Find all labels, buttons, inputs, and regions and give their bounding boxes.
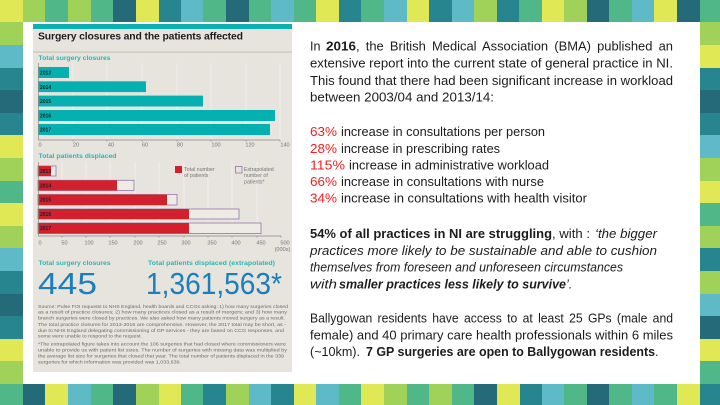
legend: total number of patients: of patients bbox=[184, 173, 209, 179]
list: workload increases: increase in administrative workload bbox=[349, 158, 549, 172]
bar chart: total patients displaced: 150 bbox=[108, 240, 118, 246]
legend: total number of patients: Total number bbox=[184, 167, 215, 173]
bar chart: total surgery closures bbox=[38, 63, 290, 148]
legend: extrapolated number of patients: Extrapolated bbox=[244, 167, 274, 173]
source notes: surgeries for which information was provided was 1,033,639. bbox=[38, 360, 181, 364]
text block: struggling practices: with bbox=[310, 278, 337, 292]
text block: BMA report intro: , the British Medical Association (BMA) published an bbox=[356, 40, 673, 54]
stat: total surgery closures 445: 445 bbox=[38, 266, 97, 301]
bar chart: total surgery closures: 2015 bbox=[40, 99, 51, 105]
heading: surgery closures and the patients affected: Surgery closures and the patients affected bbox=[38, 32, 243, 42]
text block: struggling practices: 54% of all practices in NI are struggling bbox=[310, 227, 552, 241]
text block: BMA report intro bbox=[310, 40, 673, 105]
bar chart: total patients displaced: 2014 bbox=[40, 183, 51, 189]
bar chart: total patients displaced: 250 bbox=[157, 240, 167, 246]
list: workload increases: 28% bbox=[310, 142, 337, 156]
bar chart: total patients displaced: 350 bbox=[207, 240, 217, 246]
text block: struggling practices: smaller practices less likely to survive bbox=[339, 278, 566, 292]
source notes bbox=[38, 304, 288, 364]
legend: extrapolated number of patients: patients* bbox=[244, 180, 265, 186]
bar chart: total surgery closures: 80 bbox=[177, 142, 183, 148]
list: workload increases: increase in consultations with health visitor bbox=[341, 192, 587, 206]
list: workload increases: increase in prescribing rates bbox=[341, 142, 500, 156]
bar chart: total patients displaced: 500 bbox=[280, 240, 290, 246]
legend: total number of patients bbox=[175, 166, 215, 179]
text block: BMA report intro: This found that there had been significant increase in workload bbox=[310, 74, 673, 88]
source notes: unable to provide us with patient list sizes. The number of surgeries with missing data was multiplied by bbox=[38, 347, 288, 352]
text block: BMA report intro: 2016 bbox=[326, 40, 356, 54]
stat: total patients displaced 1,361,563: 1,361,563* bbox=[146, 266, 282, 301]
bar chart: total surgery closures: 2014 bbox=[40, 85, 51, 91]
bar chart: total patients displaced: 400 bbox=[231, 240, 241, 246]
bar chart: total patients displaced: 100 bbox=[84, 240, 94, 246]
bar chart: total surgery closures: 2016 bbox=[40, 114, 51, 120]
source notes: The total practice closures for 2013-2016 are comprehensive. However, the 2017 total may be short, as - bbox=[38, 322, 287, 327]
bar chart: total patients displaced: 300 bbox=[181, 240, 191, 246]
text block: BMA report intro: between 2003/04 and 2013/14: bbox=[310, 91, 494, 105]
bar chart: total patients displaced: 2015 bbox=[40, 198, 51, 204]
bar chart: total surgery closures: 120 bbox=[245, 142, 255, 148]
text block: Ballygowan residents bbox=[310, 312, 673, 359]
bar chart: total surgery closures: 40 bbox=[108, 142, 114, 148]
source notes: due to NHS England delegating commissioning of GP services - they are based on CCG responses, and bbox=[38, 328, 285, 333]
list: workload increases: 66% bbox=[310, 175, 337, 189]
subheading: total surgery closures: Total surgery closures bbox=[38, 55, 111, 62]
bar chart: total patients displaced: 200 bbox=[133, 240, 143, 246]
text block: struggling practices: ’. bbox=[566, 278, 572, 292]
text block: Ballygowan residents: . bbox=[655, 345, 658, 359]
list: workload increases: 34% bbox=[310, 192, 337, 206]
bar chart: total patients displaced: 50 bbox=[61, 240, 68, 246]
text block: Ballygowan residents: Ballygowan residents have access to at least 25 GPs (male and bbox=[310, 312, 673, 326]
list: workload increases: increase in consultations per person bbox=[341, 125, 545, 139]
bar chart: total surgery closures: 0 bbox=[38, 142, 42, 148]
text block: struggling practices: , with : bbox=[552, 227, 590, 241]
bar chart: total patients displaced: 0 bbox=[38, 240, 42, 246]
source notes: the average list size for surgeries that closed that year. The total number of patients displaced in the 339 bbox=[38, 354, 285, 358]
stat: total surgery closures 445 bbox=[38, 260, 111, 301]
source notes: *The extrapolated figure takes into account the 106 surgeries that had closed where commissioners were bbox=[38, 342, 287, 346]
bar chart: total surgery closures: 2017 bbox=[40, 128, 51, 134]
legend: extrapolated number of patients bbox=[236, 166, 274, 186]
bar chart: total patients displaced bbox=[38, 162, 291, 253]
border: right column of coloured squares bbox=[700, 22, 720, 384]
text block: struggling practices: ‘the bigger bbox=[595, 227, 658, 241]
text block: struggling practices: practices more likely to be sustainable and able to cushion bbox=[309, 244, 657, 258]
text block: struggling practices bbox=[309, 227, 658, 292]
source notes: Source: Pulse FOI requests to NHS England, health boards and CCGs asking: 1) how many surgeries closed bbox=[38, 304, 288, 309]
border: left column of coloured squares bbox=[0, 22, 23, 384]
bar chart: total surgery closures: 100 bbox=[211, 142, 221, 148]
legend: extrapolated number of patients: number of bbox=[244, 173, 268, 179]
bar chart: total patients displaced: 2013 bbox=[40, 169, 51, 175]
list: workload increases bbox=[310, 125, 587, 206]
bar chart: total surgery closures: 140 bbox=[280, 142, 290, 148]
bar chart: total surgery closures: 20 bbox=[73, 142, 79, 148]
bar chart: total patients displaced: 450 bbox=[256, 240, 266, 246]
text block: Ballygowan residents: 7 GP surgeries are open to Ballygowan residents bbox=[366, 345, 655, 359]
list: workload increases: 115% bbox=[310, 158, 345, 172]
bar chart: total patients displaced: (000s) bbox=[275, 247, 291, 253]
text block: BMA report intro: In bbox=[310, 40, 321, 54]
list: workload increases: 63% bbox=[310, 125, 337, 139]
source notes: some were unable to respond to the request. bbox=[38, 334, 142, 338]
bar chart: total patients displaced: 2016 bbox=[40, 212, 51, 218]
source notes: branch surgeries were closed by practices. We also asked how many patients moved surgery as a result. bbox=[38, 316, 285, 320]
list: workload increases: increase in consultations with nurse bbox=[341, 175, 544, 189]
bar chart: total patients displaced: 2017 bbox=[40, 226, 51, 232]
text block: Ballygowan residents: female) and 40 primary care health professionals within 6 miles bbox=[310, 328, 673, 342]
text block: BMA report intro: extensive report into the current state of general practice in NI. bbox=[310, 57, 673, 71]
bar chart: total surgery closures: 2013 bbox=[40, 70, 51, 76]
source notes: as a result of practice closures; 2) how many practices closed as a result of mergers; and 3) how many bbox=[38, 310, 288, 315]
bar chart: total surgery closures: 60 bbox=[142, 142, 148, 148]
stat: total patients displaced 1,361,563: Total patients displaced (extrapolated) bbox=[148, 260, 275, 267]
panel: surgery closures infographic bbox=[33, 24, 292, 372]
stat: total surgery closures 445: Total surgery closures bbox=[38, 260, 111, 267]
border: bottom row of coloured squares bbox=[0, 384, 720, 405]
subheading: total patients displaced: Total patients displaced bbox=[38, 153, 116, 160]
text block: Ballygowan residents: (~10km). bbox=[310, 345, 360, 359]
border: top row of coloured squares bbox=[0, 0, 720, 22]
text block: struggling practices: themselves from foreseen and unforeseen circumstances bbox=[310, 260, 624, 274]
